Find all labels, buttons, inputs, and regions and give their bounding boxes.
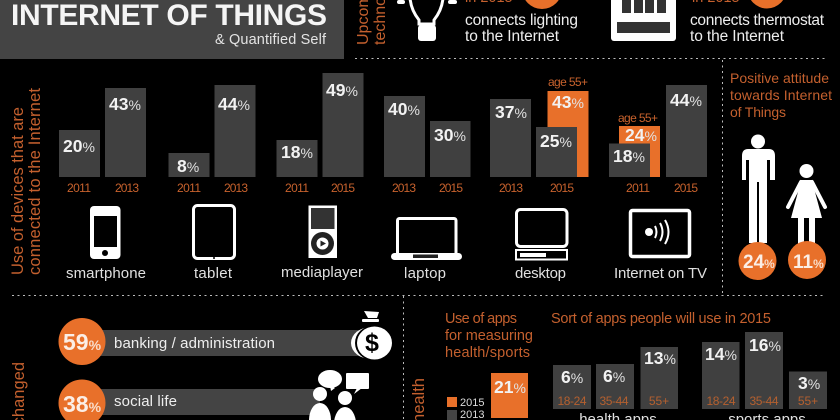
bar 2013 bbox=[105, 88, 146, 195]
label: Internet on TV: Internet on TV bbox=[614, 265, 707, 282]
badge: 59% bbox=[58, 318, 106, 365]
panel: mediaplayer bbox=[276, 73, 364, 281]
bar: sports 35-44 bbox=[745, 332, 783, 409]
label: tablet: tablet bbox=[194, 265, 233, 282]
badge: women 11%: 11% bbox=[793, 252, 824, 273]
title banner bbox=[0, 0, 344, 59]
bar: health 35-44: 6% bbox=[603, 366, 625, 386]
bar: 21%: 21% bbox=[494, 377, 526, 397]
row: banking bbox=[58, 311, 392, 365]
panel: use of apps bbox=[445, 311, 533, 420]
bar 2015 age 55+: age 55+ bbox=[548, 75, 588, 89]
lighting text: connects lighting bbox=[465, 12, 578, 29]
thermostat text: connects thermostat bbox=[690, 12, 825, 29]
bar 2011 age 55+: age 55+ bbox=[618, 111, 658, 125]
bar: health 18-24: 18-24 bbox=[558, 394, 587, 408]
bar 2013 bbox=[490, 99, 531, 195]
heading: use of devices: Use of devices that are bbox=[9, 107, 27, 275]
icon: tablet bbox=[194, 206, 234, 259]
bar 2015: 25% bbox=[540, 131, 572, 151]
row: social life bbox=[58, 370, 369, 420]
bar: sports 55+: 55+ bbox=[798, 394, 818, 408]
bar 2011 age 55+ bbox=[618, 111, 660, 177]
heading: Sort of apps people will use in 2015 bbox=[551, 311, 771, 327]
panel: desktop bbox=[490, 75, 588, 282]
bar 2015 bbox=[666, 85, 707, 195]
heading: use of devices: connected to the Internet bbox=[26, 88, 44, 275]
icon: laptop bbox=[391, 218, 462, 260]
panel: Internet on TV bbox=[609, 85, 707, 282]
bar: health 35-44: 35-44 bbox=[600, 394, 629, 408]
icon: TV bbox=[630, 210, 690, 256]
bar: sports 18-24 bbox=[702, 342, 740, 409]
badge: 38% bbox=[58, 380, 106, 420]
bar 2013: 2013 bbox=[499, 181, 523, 195]
bar 2013: 40% bbox=[388, 99, 420, 119]
icon: desktop bbox=[516, 210, 567, 260]
bar 2015 age 55+: 43% bbox=[552, 92, 584, 112]
bar 2011 bbox=[168, 153, 210, 195]
badge: 59%: 59% bbox=[63, 329, 102, 355]
heading: health/sports bbox=[445, 345, 530, 361]
legend bbox=[447, 397, 484, 420]
panel: upcoming technologies bbox=[355, 0, 825, 45]
label: social life bbox=[114, 393, 177, 410]
badge: women 11% bbox=[788, 241, 826, 279]
bar 2011: 18% bbox=[613, 146, 645, 166]
icon: people talking bbox=[309, 370, 369, 420]
heading: upcoming technologies bbox=[355, 0, 389, 45]
label: mediaplayer: mediaplayer bbox=[281, 264, 363, 281]
bar 2011 bbox=[276, 140, 318, 195]
icon: thermostat bbox=[611, 0, 676, 41]
bar: health 55+: 55+ bbox=[649, 394, 669, 408]
bar 2013: 2013 bbox=[392, 181, 416, 195]
bar: sports 55+: 3% bbox=[798, 373, 820, 393]
bar 2015: 2015 bbox=[439, 181, 463, 195]
icon: money bag bbox=[351, 311, 392, 360]
bar 2011: 2011 bbox=[626, 181, 650, 195]
panel: laptop bbox=[384, 96, 470, 282]
badge: 38%: 38% bbox=[63, 391, 102, 417]
panel: sort of apps bbox=[551, 311, 827, 420]
label: desktop: desktop bbox=[515, 265, 566, 282]
heading: towards Internet bbox=[730, 87, 832, 103]
bar 2013: 44% bbox=[218, 94, 250, 114]
bar 2011: 20% bbox=[63, 136, 95, 156]
bar: sports 35-44: 35-44 bbox=[750, 394, 779, 408]
bar bbox=[100, 330, 365, 356]
thermostat text: to the Internet bbox=[690, 28, 785, 45]
bar 2015 bbox=[322, 73, 364, 195]
badge: lighting bbox=[522, 0, 562, 9]
icon: mediaplayer bbox=[308, 206, 337, 258]
heading: of Things bbox=[730, 104, 786, 120]
bar 2015: 30% bbox=[434, 125, 466, 145]
icon: man bbox=[742, 134, 775, 243]
bar 2013: 2013 bbox=[115, 181, 139, 195]
bar 2013: 2013 bbox=[224, 181, 248, 195]
bar: health 55+: 13% bbox=[644, 348, 676, 368]
bar: sports 35-44: 16% bbox=[749, 335, 781, 355]
bar: sports 18-24: 14% bbox=[705, 344, 737, 364]
bar 2013: 37% bbox=[495, 102, 527, 122]
bar 2015 age 55+ bbox=[548, 75, 588, 177]
bar 2015: 49% bbox=[326, 80, 358, 100]
bar 2015: 2015 bbox=[674, 181, 698, 195]
label: banking / administration bbox=[114, 335, 275, 352]
bar bbox=[100, 389, 320, 415]
heading: for measuring bbox=[445, 328, 533, 344]
panel: positive attitude bbox=[730, 70, 832, 280]
bar 2015 bbox=[430, 121, 470, 195]
icon: smartphone bbox=[90, 206, 120, 259]
panel: smartphone bbox=[59, 88, 146, 282]
icon: light bulb bbox=[397, 0, 457, 41]
bar: health 18-24 bbox=[553, 365, 591, 409]
bar: health 55+ bbox=[640, 347, 678, 409]
bar 2011: 2011 bbox=[177, 181, 201, 195]
heading: use of devices bbox=[9, 88, 44, 275]
bar 2013 bbox=[214, 85, 256, 195]
bar 2013 bbox=[384, 96, 425, 195]
bar 2013: 43% bbox=[109, 94, 141, 114]
bar 2011: 2011 bbox=[67, 181, 91, 195]
badge: men 24%: 24% bbox=[743, 252, 775, 273]
label: smartphone: smartphone bbox=[66, 265, 146, 282]
bar: sports 18-24: 18-24 bbox=[706, 394, 736, 408]
badge: men 24% bbox=[738, 242, 776, 280]
badge: thermostat bbox=[748, 0, 786, 8]
icon: money bag: $ bbox=[365, 329, 379, 357]
bar 2011 bbox=[609, 144, 650, 195]
bar 2015: 2015 bbox=[550, 181, 574, 195]
label: laptop: laptop bbox=[404, 265, 446, 282]
bar 2011: 18% bbox=[281, 142, 313, 162]
bar: health 35-44 bbox=[596, 364, 634, 409]
bar 2015: 2015 bbox=[331, 181, 355, 195]
legend: 2015 bbox=[460, 397, 484, 409]
icon: woman bbox=[788, 164, 825, 244]
bar 2015: 44% bbox=[670, 90, 702, 110]
bar 2011: 2011 bbox=[285, 181, 309, 195]
panel: tablet bbox=[168, 85, 256, 282]
heading: Use of apps bbox=[445, 311, 517, 327]
bar 2011: 8% bbox=[177, 156, 199, 176]
bar: health 18-24: 6% bbox=[561, 367, 583, 387]
lighting text: to the Internet bbox=[465, 28, 560, 45]
bar 2011 bbox=[59, 130, 100, 195]
heading: Positive attitude bbox=[730, 70, 829, 86]
subtitle: & Quantified Self bbox=[215, 32, 327, 48]
bar 2015 bbox=[536, 127, 577, 195]
bar 2011 age 55+: 24% bbox=[625, 125, 657, 145]
bar: sports 55+ bbox=[789, 372, 827, 409]
